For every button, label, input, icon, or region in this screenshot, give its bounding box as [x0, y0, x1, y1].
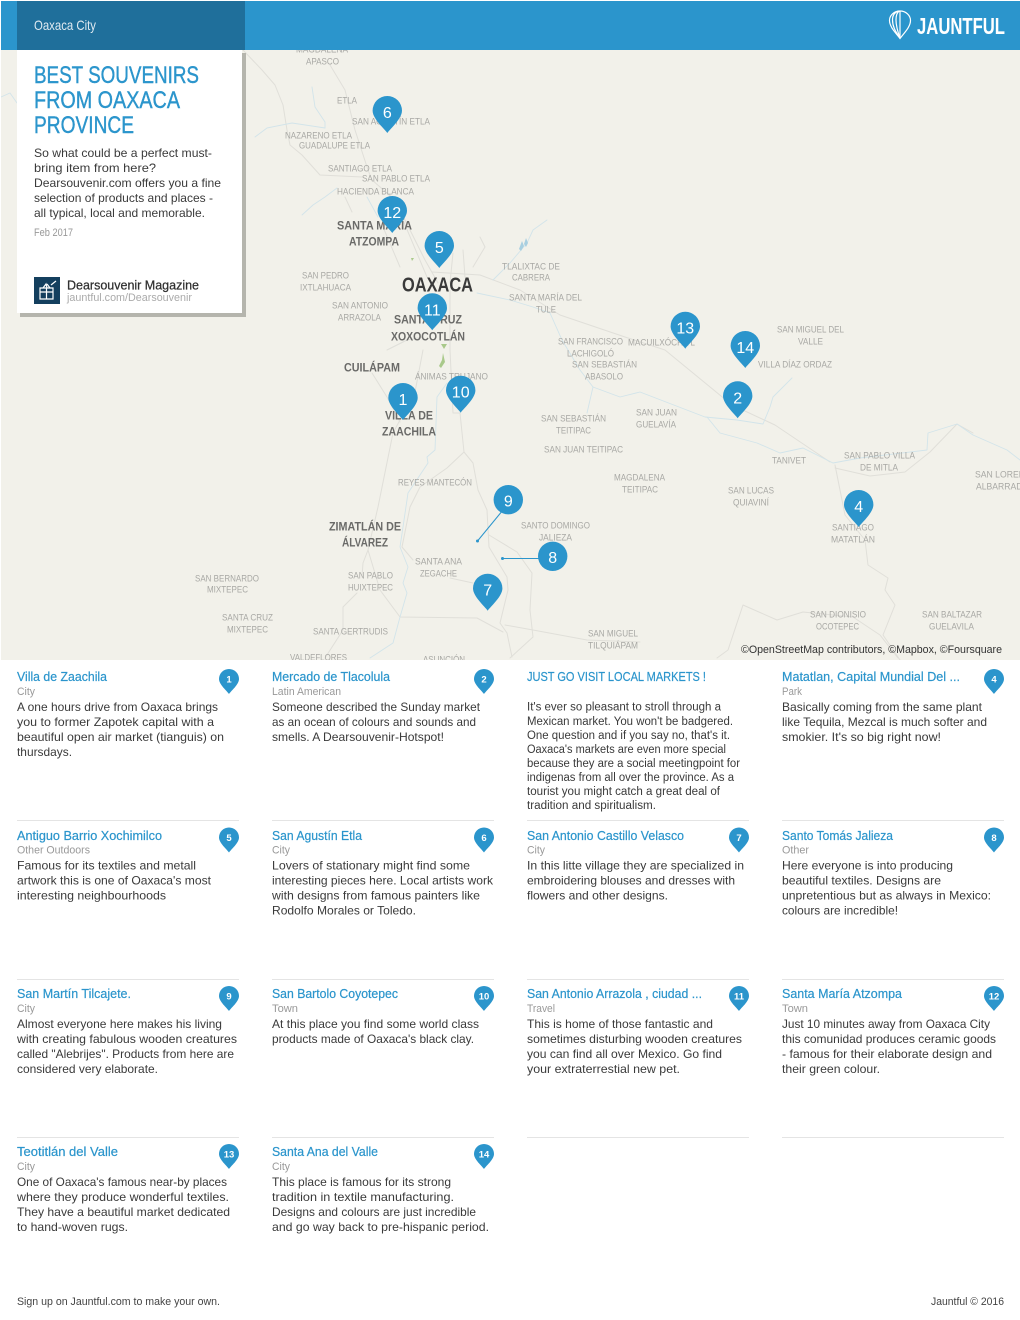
card 2: Mercado de Tlacolula: Latin American — [272, 686, 341, 698]
author name: Dearsouvenir Magazine — [67, 278, 199, 292]
place name labels: JALIEZA — [539, 532, 573, 543]
card 3: Just go visit local markets: because they are a social meetingpoint for — [527, 758, 740, 770]
pin 4: 4 — [991, 674, 997, 686]
author url: jauntful.com/Dearsouvenir — [66, 292, 192, 304]
card 4: Matatlan: like Tequila, Mezcal is much softer and — [782, 715, 987, 729]
place name labels: NAZARENO ETLA — [285, 130, 352, 141]
card 5: Antiguo Barrio Xochimilco: Other Outdoors — [17, 844, 90, 856]
card 2: Mercado de Tlacolula: as an ocean of colours and sounds and — [272, 715, 476, 729]
place name labels: ETLA — [337, 95, 357, 106]
pin 6 — [474, 828, 494, 852]
card 13: Teotitlán del Valle: to hand-woven rugs. — [17, 1220, 128, 1234]
card 3: Just go visit local markets: One question and if you say no, that's it. — [527, 730, 730, 742]
place name labels: SANTA MARÍA DEL — [509, 292, 583, 303]
place name labels: GUELAVILA — [929, 621, 975, 632]
intro text: all typical, local and memorable. — [34, 206, 205, 220]
place name labels: SAN LUCAS — [728, 485, 774, 496]
place name labels: SANTA ANA — [415, 556, 463, 567]
card 5: Antiguo Barrio Xochimilco: Famous for its textiles and metall — [17, 858, 196, 872]
place name labels: VALLE — [798, 336, 823, 347]
place name labels: SAN SEBASTIÁN — [541, 413, 606, 424]
place name labels: TEITIPAC — [622, 484, 658, 495]
map pin 14 — [731, 331, 760, 368]
intro text — [34, 146, 221, 220]
place name labels: SANTA GERTRUDIS — [313, 626, 388, 637]
place name labels: SAN SEBASTIÁN — [572, 359, 637, 370]
place name labels: GUELAVÍA — [636, 419, 677, 430]
pin 9 — [219, 986, 239, 1011]
card 8: Santo Tomás Jalieza: Santo Tomás Jalieza — [782, 829, 893, 843]
map pin 14: 14 — [736, 340, 754, 357]
place name labels: OCOTEPEC — [816, 621, 859, 632]
place name labels: MIXTEPEC — [207, 584, 248, 595]
place name labels: XOXOCOTLÁN — [391, 328, 465, 343]
pin 11 — [729, 986, 749, 1011]
card 13: Teotitlán del Valle — [16, 1144, 239, 1234]
city name: Oaxaca City — [34, 17, 96, 33]
card 14: Santa Ana del Valle — [272, 1144, 494, 1234]
place name labels: TULE — [536, 304, 556, 315]
map pin 1 — [388, 383, 418, 420]
place name labels: TEITIPAC — [556, 425, 591, 436]
card 7: San Antonio Castillo Velasco — [527, 828, 749, 902]
card 13: Teotitlán del Valle: They have a beautiful market dedicated — [17, 1205, 230, 1219]
card 1: Villa de Zaachila: thursdays. — [17, 745, 72, 759]
place name labels: VILLA DE — [385, 408, 433, 422]
card 6: San Agustín Etla: interesting pieces here. Local artists work — [272, 874, 494, 888]
map pin 2 — [723, 381, 752, 418]
pin 1 — [219, 669, 239, 694]
card 13: Teotitlán del Valle: One of Oaxaca's famous near-by places — [17, 1175, 227, 1189]
place name labels: LACHIGOLÓ — [567, 348, 614, 359]
logo: Jauntful — [890, 11, 1005, 39]
footer: sign up: Sign up on Jauntful.com to make your own. — [17, 1296, 220, 1308]
map pin 4: 4 — [854, 499, 863, 516]
place name labels: CABRERA — [512, 272, 550, 283]
pin 2 — [474, 669, 494, 694]
rivers — [1, 87, 1020, 658]
card 4: Matatlan: smokier. It's so big right now! — [782, 730, 941, 744]
place name labels: TLALIXTAC DE — [502, 261, 560, 272]
card 1: Villa de Zaachila: you to former Zapotek capital with a — [17, 715, 214, 729]
map background — [1, 44, 1020, 665]
place name labels: SANTA CRUZ — [222, 612, 273, 623]
card 2: Mercado de Tlacolula: smells. A Dearsouvenir-Hotspot! — [272, 730, 444, 744]
parks and lakes — [411, 238, 528, 368]
map pin 1: 1 — [399, 392, 408, 409]
place name labels: ARRAZOLA — [338, 312, 381, 323]
card 5: Antiguo Barrio Xochimilco: interesting neighbourhoods — [17, 888, 166, 902]
card 9: San Martín Tilcajete — [16, 986, 239, 1076]
place name labels: CUILÁPAM — [344, 359, 400, 374]
card 1: Villa de Zaachila: beautiful open air market (tianguis) on — [17, 730, 224, 744]
card 11: San Antonio Arrazola: Travel — [527, 1003, 555, 1015]
card 6: San Agustín Etla: San Agustín Etla — [272, 829, 362, 843]
card 14: Santa Ana del Valle: tradition in textile manufacturing. — [272, 1190, 454, 1204]
place name labels: HUIXTEPEC — [348, 582, 393, 593]
map pin 11 — [418, 293, 447, 330]
place name labels: SAN MIGUEL — [588, 628, 639, 639]
card 6: San Agustín Etla: City — [272, 844, 290, 856]
place name labels: SAN BERNARDO — [195, 573, 259, 584]
place name labels: SANTIAGO — [832, 522, 874, 533]
map pin 13: 13 — [676, 321, 694, 338]
footer: copyright: Jauntful © 2016 — [931, 1296, 1004, 1308]
card 5: Antiguo Barrio Xochimilco — [17, 828, 239, 902]
card 5: Antiguo Barrio Xochimilco: artwork this is one of Oaxaca's most — [17, 874, 212, 888]
card 10: San Bartolo Coyotepec: Town — [272, 1003, 298, 1015]
card 7: San Antonio Castillo Velasco: San Antonio Castillo Velasco — [527, 829, 684, 843]
map pin 4 — [844, 490, 873, 527]
place name labels: SAN DIONISIO — [810, 609, 866, 620]
card 11: San Antonio Arrazola: This is home of those fantastic and — [527, 1017, 713, 1031]
card 13: Teotitlán del Valle: Teotitlán del Valle — [17, 1145, 118, 1159]
card 3: Just go visit local markets: It's ever so pleasant to stroll through a — [527, 702, 722, 714]
card 4: Matatlan — [782, 669, 1004, 744]
card 3: Just go visit local markets: indigenas from all over the province. As a — [527, 772, 735, 784]
date: Feb 2017 — [34, 227, 73, 239]
card 12: Santa María Atzompa — [782, 986, 1004, 1076]
card 12: Santa María Atzompa: Town — [782, 1003, 808, 1015]
card 8: Santo Tomás Jalieza — [782, 828, 1004, 918]
place name labels: SAN PABLO ETLA — [362, 173, 430, 184]
place name labels: MIXTEPEC — [227, 624, 268, 635]
card 6: San Agustín Etla — [271, 828, 494, 918]
card 11: San Antonio Arrazola — [527, 986, 749, 1076]
place name labels: SAN PABLO — [348, 570, 393, 581]
card 12: Santa María Atzompa: - famous for their elaborate design and — [782, 1047, 992, 1061]
place name labels: MACUILXÓCHITL — [628, 337, 696, 348]
place name labels: SANTA CRUZ — [394, 312, 462, 326]
place name labels: SAN BALTAZAR — [922, 609, 982, 620]
place name labels: HACIENDA BLANCA — [337, 186, 415, 197]
place name labels: GUADALUPE ETLA — [299, 140, 370, 151]
header bar — [1, 1, 1020, 50]
map pin 5 — [425, 231, 454, 268]
pin 6: 6 — [481, 833, 487, 844]
card 1: Villa de Zaachila: Villa de Zaachila — [17, 670, 107, 684]
card 6: San Agustín Etla: Rodolfo Morales or Toledo. — [272, 904, 416, 918]
card 7: San Antonio Castillo Velasco: embroidering blouses and dresses with — [527, 874, 735, 888]
place name labels: SAN PEDRO — [302, 270, 349, 281]
card 3: Just go visit local markets: Oaxaca's markets are even more special — [527, 744, 726, 756]
map pin 13 — [671, 312, 700, 349]
pin 8: 8 — [991, 833, 997, 844]
place name labels: VALDEFLORES — [290, 652, 347, 663]
card 12: Santa María Atzompa: Just 10 minutes away from Oaxaca City — [782, 1017, 990, 1031]
card 3: Just go visit local markets: tradition and spiritualism. — [527, 800, 656, 812]
card 2: Mercado de Tlacolula — [272, 669, 494, 744]
map pin 8 with leader line: 8 — [548, 550, 557, 567]
map pin 10: 10 — [452, 385, 470, 402]
heading: FROM OAXACA — [34, 87, 181, 114]
pin 10 — [474, 986, 494, 1011]
pin 1: 1 — [226, 674, 232, 686]
pin 10: 10 — [479, 992, 489, 1002]
card 9: San Martín Tilcajete: with creating fabulous wooden creatures — [16, 1032, 237, 1046]
pin 5: 5 — [226, 833, 232, 844]
place name labels: TILQUIÁPAM — [588, 640, 638, 651]
card 9: San Martín Tilcajete: City — [17, 1003, 35, 1015]
pin 9: 9 — [226, 992, 232, 1002]
card 1: Villa de Zaachila: A one hours drive from Oaxaca brings — [17, 700, 218, 714]
card 8: Santo Tomás Jalieza: Other — [782, 844, 809, 856]
map pin 9 with leader line — [476, 485, 523, 542]
card 1: Villa de Zaachila: City — [17, 686, 35, 698]
map pin 7 — [473, 574, 502, 611]
pin 2: 2 — [481, 674, 487, 686]
place name labels: SAN PABLO VILLA — [844, 450, 916, 461]
intro text: Dearsouvenir.com offers you a fine — [34, 176, 221, 190]
map pin 10 — [446, 376, 475, 413]
heading: PROVINCE — [34, 112, 134, 139]
card 7: San Antonio Castillo Velasco: flowers and other designs. — [527, 888, 668, 902]
card 14: Santa Ana del Valle: Designs and colours are just incredible — [272, 1205, 476, 1219]
place name labels: ATZOMPA — [349, 234, 399, 248]
pin 5 — [219, 828, 239, 852]
pin 8 — [984, 828, 1004, 852]
card 6: San Agustín Etla: with designs from famous painters like — [271, 888, 480, 902]
card 9: San Martín Tilcajete: Almost everyone here makes his living — [17, 1017, 222, 1031]
map pin 12 — [378, 196, 407, 233]
place name labels — [195, 44, 1020, 665]
card 13: Teotitlán del Valle: City — [17, 1161, 35, 1173]
card 4: Matatlan: Matatlan, Capital Mundial Del ... — [782, 670, 960, 684]
place name labels: DE MITLA — [860, 462, 899, 473]
card 7: San Antonio Castillo Velasco: City — [527, 844, 545, 856]
intro text: So what could be a perfect must- — [34, 146, 212, 160]
card 11: San Antonio Arrazola: you can find all over Mexico. Go find — [527, 1047, 722, 1061]
place name labels: SANTIAGO ETLA — [328, 163, 392, 174]
card 3: Just go visit local markets: JUST GO VISIT LOCAL MARKETS ! — [527, 670, 706, 684]
place name labels: REYES MANTECÓN — [398, 477, 472, 488]
pin 13 — [219, 1144, 239, 1169]
panel: intro — [17, 50, 246, 317]
pin 4 — [984, 669, 1004, 694]
place name labels: SAN AGUSTÍN ETLA — [352, 116, 431, 127]
card 14: Santa Ana del Valle: Santa Ana del Valle — [272, 1145, 378, 1159]
pin 7: 7 — [736, 833, 742, 844]
card 11: San Antonio Arrazola: sometimes disturbing wooden creatures — [527, 1032, 742, 1046]
card 2: Mercado de Tlacolula: Someone described the Sunday market — [272, 700, 481, 714]
place name labels: ZEGACHE — [420, 568, 457, 579]
card 11: San Antonio Arrazola: your extraterrestial new pet. — [527, 1062, 680, 1076]
card 2: Mercado de Tlacolula: Mercado de Tlacolula — [272, 670, 390, 684]
card 12: Santa María Atzompa: their green colour. — [782, 1062, 880, 1076]
intro text: selection of products and places - — [34, 191, 213, 205]
card 8: Santo Tomás Jalieza: beautiful textiles. Designs are — [782, 874, 941, 888]
heading: BEST SOUVENIRS — [34, 62, 199, 89]
place name labels: ASUNCIÓN — [423, 654, 465, 665]
pin 14: 14 — [479, 1150, 490, 1160]
card 4: Matatlan: Basically coming from the same plant — [782, 700, 983, 714]
place name labels: SAN MIGUEL DEL — [777, 324, 845, 335]
road network — [243, 50, 973, 660]
card 9: San Martín Tilcajete: called "Alebrijes". Products from here are — [17, 1047, 234, 1061]
place name labels: ABASOLO — [585, 371, 623, 382]
map pin 2: 2 — [733, 390, 742, 407]
card 3: Just go visit local markets: Mexican market. You won't be badgered. — [527, 716, 733, 728]
place name labels: ÁLVAREZ — [342, 534, 388, 549]
card 11: San Antonio Arrazola: San Antonio Arrazola , ciudad ... — [527, 987, 702, 1001]
card 4: Matatlan: Park — [782, 686, 802, 698]
card 13: Teotitlán del Valle: where they produce wonderful textiles. — [16, 1190, 229, 1204]
place name labels: IXTLAHUACA — [300, 282, 352, 293]
place name labels: SAN ANTONIO — [332, 300, 388, 311]
pin 12 — [984, 986, 1004, 1011]
card 12: Santa María Atzompa: Santa María Atzompa — [782, 987, 902, 1001]
card 10: San Bartolo Coyotepec: products made of Oaxaca's black clay. — [272, 1032, 474, 1046]
card 8: Santo Tomás Jalieza: Here everyone is into producing — [782, 858, 953, 872]
card 10: San Bartolo Coyotepec: San Bartolo Coyotepec — [272, 987, 398, 1001]
card 9: San Martín Tilcajete: considered very elaborate. — [17, 1062, 158, 1076]
icon: gift avatar — [34, 277, 60, 304]
card 12: Santa María Atzompa: this comunidad produces ceramic goods — [782, 1032, 996, 1046]
place name labels: SAN JUAN TEITIPAC — [544, 444, 623, 455]
card 14: Santa Ana del Valle: and go way back to pre-hispanic period. — [272, 1220, 489, 1234]
place name labels: MATATLÁN — [831, 534, 875, 545]
map pin 6 — [373, 96, 402, 133]
card 1: Villa de Zaachila — [17, 669, 239, 759]
map pin 7: 7 — [483, 583, 492, 600]
place name labels: SANTO DOMINGO — [521, 520, 590, 531]
heading — [34, 62, 199, 139]
map pin 11: 11 — [424, 302, 441, 319]
pin 11: 11 — [734, 992, 745, 1002]
pin 14 — [474, 1144, 494, 1169]
map pin 5: 5 — [435, 240, 444, 257]
place name labels: SAN FRANCISCO — [558, 336, 623, 347]
pin 13: 13 — [224, 1150, 234, 1160]
icon: balloon — [890, 11, 910, 38]
card 8: Santo Tomás Jalieza: unpretentious but as always in Mexico: — [782, 888, 991, 902]
intro text: bring item from here? — [34, 161, 156, 175]
card 14: Santa Ana del Valle: This place is famous for its strong — [272, 1175, 451, 1189]
place name labels: VILLA DÍAZ ORDAZ — [758, 359, 832, 370]
place name labels: ZAACHILA — [382, 424, 436, 438]
map pin 6: 6 — [383, 105, 392, 122]
map attribution: ©OpenStreetMap contributors, ©Mapbox, ©Foursquare — [741, 644, 1002, 656]
card 9: San Martín Tilcajete: San Martín Tilcajete. — [17, 987, 131, 1001]
pin 7 — [729, 828, 749, 852]
card 5: Antiguo Barrio Xochimilco: Antiguo Barrio Xochimilco — [17, 829, 162, 843]
card 10: San Bartolo Coyotepec — [272, 986, 494, 1046]
pin 12: 12 — [989, 992, 999, 1002]
card 3: Just go visit local markets: tourist you might catch a great deal of — [527, 786, 721, 798]
card 14: Santa Ana del Valle: City — [272, 1161, 290, 1173]
place name labels: APASCO — [306, 56, 339, 67]
card 10: San Bartolo Coyotepec: At this place you find some world class — [272, 1017, 479, 1031]
place name labels: TANIVET — [772, 455, 806, 466]
place name labels: QUIAVINÍ — [733, 497, 769, 508]
map pin 8 with leader line — [501, 542, 567, 571]
card 3: Just go visit local markets — [527, 670, 740, 812]
place name labels: ZIMATLÁN DE — [329, 518, 401, 533]
map pin 9 with leader line: 9 — [504, 493, 513, 510]
place name labels: MAGDALENA — [296, 44, 349, 55]
place name labels: ÁNIMAS TRUJANO — [415, 371, 488, 382]
card 7: San Antonio Castillo Velasco: In this litte village they are specialized in — [527, 858, 744, 872]
card 6: San Agustín Etla: Lovers of stationary might find some — [272, 858, 470, 872]
place name labels: OAXACA — [402, 274, 473, 296]
place name labels: MAGDALENA — [614, 472, 666, 483]
map pin 12: 12 — [383, 205, 401, 222]
place name labels: SAN JUAN — [636, 407, 677, 418]
place name labels: SANTA MARÍA — [337, 217, 412, 232]
card 8: Santo Tomás Jalieza: colours are incredible! — [782, 904, 898, 918]
